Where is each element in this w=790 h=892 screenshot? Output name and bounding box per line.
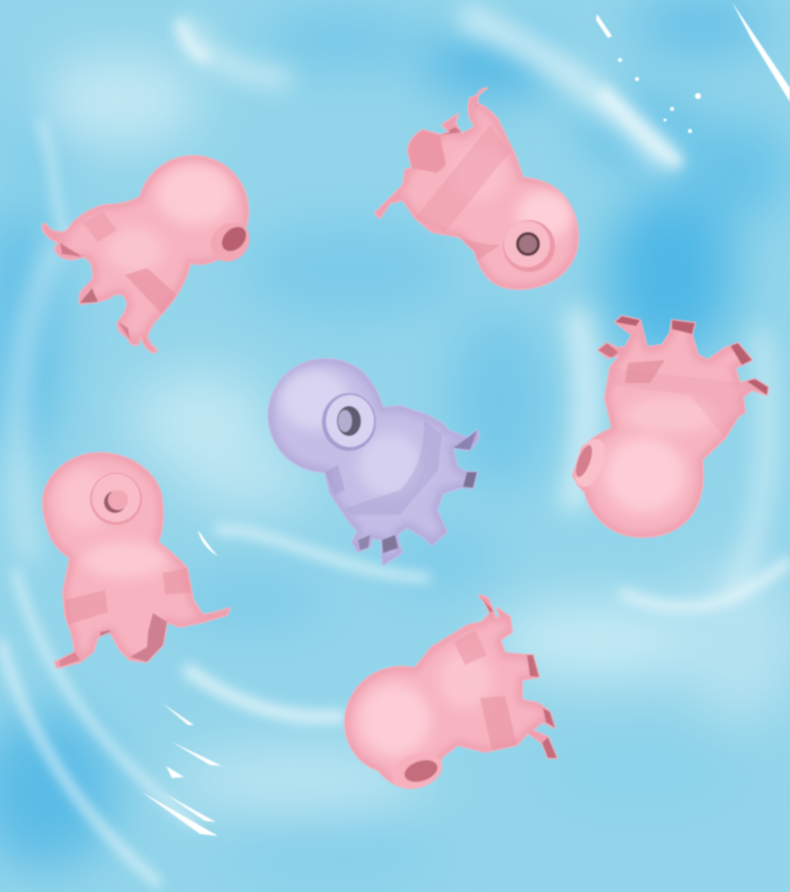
- nozzle: [503, 220, 555, 272]
- nozzle: [202, 214, 258, 270]
- octopus: right pink: [569, 316, 768, 537]
- octopus: bottom pink: [345, 595, 557, 795]
- nozzle: [322, 393, 376, 451]
- octopus: center purple: [269, 359, 479, 565]
- octopus: left pink: [43, 453, 230, 668]
- octopus: top center pink: [375, 88, 578, 289]
- nozzle: [569, 435, 611, 491]
- octopus: top left pink: [42, 156, 258, 353]
- nozzle: [90, 473, 142, 525]
- nozzle: [387, 747, 447, 795]
